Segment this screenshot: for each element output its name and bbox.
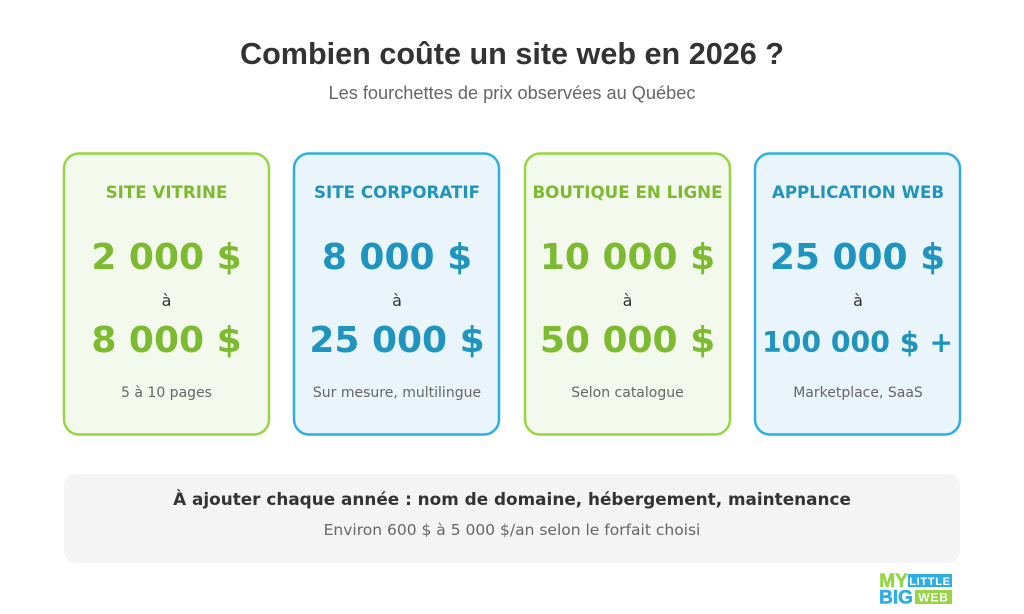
panel: site corporatif [294, 154, 499, 434]
panel: application web: APPLICATION WEB [772, 182, 944, 202]
panel: site corporatif: Sur mesure, multilingue [313, 385, 481, 401]
panel: application web [755, 154, 960, 434]
panel: application web: 25 000 $ [770, 237, 945, 278]
panel: application web: Marketplace, SaaS [793, 385, 923, 401]
panel: site vitrine: 8 000 $ [91, 320, 242, 361]
panel: site corporatif: à [392, 291, 402, 310]
logo: BIG [879, 588, 913, 608]
logo [879, 571, 952, 608]
panel: boutique en ligne: 10 000 $ [540, 237, 715, 278]
panel: boutique en ligne [525, 154, 730, 434]
panel: site vitrine: SITE VITRINE [106, 182, 227, 202]
panel: boutique en ligne: BOUTIQUE EN LIGNE [532, 182, 723, 202]
panel: site vitrine [64, 154, 269, 434]
panel: annual costs [64, 474, 960, 563]
panel: site vitrine: 2 000 $ [91, 237, 242, 278]
subtitle: Les fourchettes de prix observées au Québec [328, 83, 696, 103]
logo: LITTLE [909, 576, 951, 588]
panel: boutique en ligne: Selon catalogue [571, 385, 684, 401]
panel: boutique en ligne: 50 000 $ [540, 320, 715, 361]
title: Combien coûte un site web en 2026 ? [240, 37, 784, 71]
panel: application web: à [853, 291, 863, 310]
panel: site corporatif: 8 000 $ [322, 237, 472, 278]
logo: WEB [918, 590, 949, 604]
panel: site corporatif: 25 000 $ [309, 320, 485, 361]
panel: boutique en ligne: à [623, 291, 632, 310]
panel: annual costs: À ajouter chaque année : nom de domaine, hébergement, maintenance [173, 488, 851, 509]
panel: site vitrine: 5 à 10 pages [121, 385, 212, 401]
panel: annual costs: Environ 600 $ à 5 000 $/an selon le forfait choisi [324, 521, 700, 539]
panel: application web: 100 000 $ + [762, 326, 953, 359]
panel: site corporatif: SITE CORPORATIF [314, 182, 480, 202]
panel: site vitrine: à [162, 291, 171, 310]
logo: MY [879, 571, 908, 592]
